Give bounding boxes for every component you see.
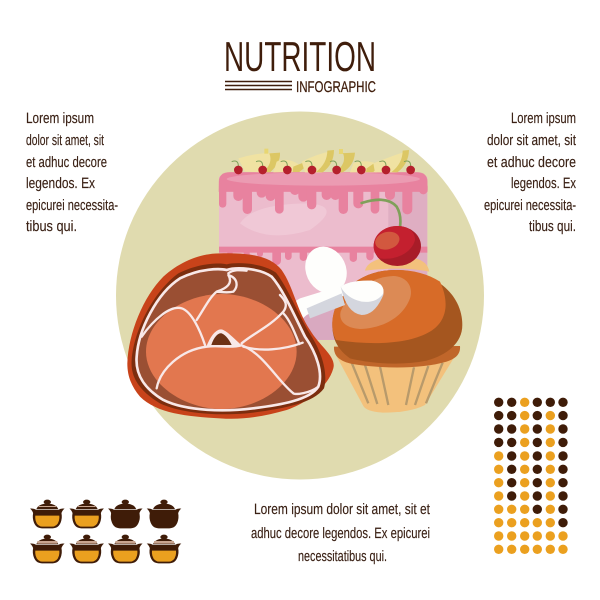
wrapper stripes xyxy=(352,363,443,405)
text block: bottom: necessitatibus qui. xyxy=(298,548,387,565)
text block: bottom xyxy=(251,501,431,565)
text block: top right: et adhuc decore xyxy=(487,154,576,171)
text block: bottom: adhuc decore legendos. Ex epicurei xyxy=(251,525,430,542)
frosting on cupcake xyxy=(365,258,429,272)
text block: top left xyxy=(26,110,118,235)
cupcake highlight xyxy=(340,276,411,329)
cupcake band xyxy=(334,346,460,368)
text block: bottom: Lorem ipsum dolor sit amet, sit et xyxy=(254,501,431,518)
pot 3 xyxy=(108,500,143,528)
small cherries xyxy=(232,161,415,174)
text block: top right xyxy=(484,110,577,235)
meat light flesh xyxy=(146,294,297,409)
cake xyxy=(219,149,427,340)
cupcake dome xyxy=(332,270,462,364)
cake body xyxy=(219,177,427,340)
upper icing xyxy=(219,172,427,209)
fat lines xyxy=(142,270,318,394)
pot 2 xyxy=(69,500,104,528)
bone marrow xyxy=(207,329,243,346)
text block: top right: Lorem ipsum xyxy=(511,110,576,127)
meat dark flesh with fat ring xyxy=(137,268,320,410)
cupcake wrapper xyxy=(335,353,457,413)
title: NUTRITION xyxy=(224,33,376,80)
pot 7 xyxy=(108,535,143,563)
text block: top left: et adhuc decore xyxy=(26,154,107,171)
large cherry xyxy=(362,200,421,266)
pot 8 xyxy=(147,535,181,563)
pot 1 xyxy=(30,500,65,528)
text block: top right: tibus qui. xyxy=(529,218,576,235)
title xyxy=(224,33,376,96)
text block: top left: epicurei necessita- xyxy=(26,197,118,214)
text block: top right: dolor sit amet, sit xyxy=(487,132,577,149)
text block: top left: tibus qui. xyxy=(26,218,77,235)
pot 5 xyxy=(30,535,65,563)
subtitle: INFOGRAPHIC xyxy=(296,79,376,96)
text block: top left: legendos. Ex xyxy=(26,175,95,192)
background circle xyxy=(116,112,484,480)
cupcake xyxy=(332,200,462,413)
pot 4 xyxy=(147,500,181,528)
meat xyxy=(127,253,334,419)
text block: top left: Lorem ipsum xyxy=(26,110,94,127)
text block: top left: dolor sit amet, sit xyxy=(26,132,105,149)
pot 6 xyxy=(69,535,104,563)
meat outer rind xyxy=(127,253,334,419)
icon row: pots xyxy=(30,500,181,563)
spoon xyxy=(280,240,384,327)
title rule lines xyxy=(225,82,292,90)
lower icing band xyxy=(219,247,427,261)
dot matrix chart xyxy=(494,398,568,554)
pineapple slices xyxy=(238,149,409,172)
text block: top right: legendos. Ex xyxy=(511,175,576,192)
